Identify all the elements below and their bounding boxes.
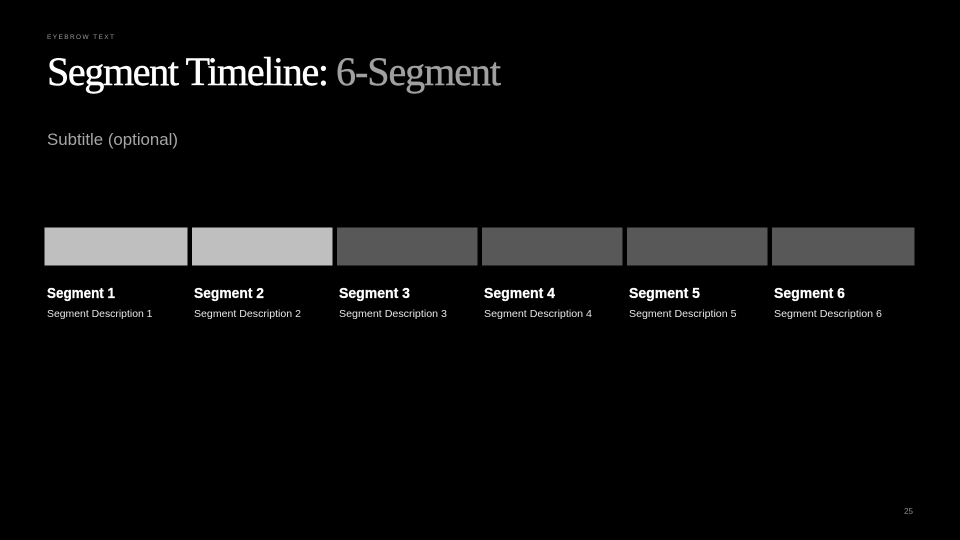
segment 6 bar — [772, 228, 914, 266]
segment 5 description: Segment Description 5 — [629, 308, 737, 320]
segment 3 description: Segment Description 3 — [339, 308, 447, 320]
segment 4 description: Segment Description 4 — [484, 308, 592, 320]
segment 6 description: Segment Description 6 — [774, 308, 882, 320]
eyebrow text: EYEBROW TEXT — [47, 34, 114, 41]
segment 4 heading: Segment 4 — [484, 286, 555, 302]
segment 1 heading: Segment 1 — [47, 286, 115, 302]
title — [47, 49, 501, 94]
subtitle: Subtitle (optional) — [47, 130, 178, 149]
segment 2 — [192, 228, 332, 320]
segment 4 bar — [482, 228, 622, 266]
segment 3 heading: Segment 3 — [339, 286, 410, 302]
segment 6 heading: Segment 6 — [774, 286, 845, 302]
title accent part: 6-Segment — [336, 49, 501, 94]
segment 5 — [627, 228, 768, 320]
segment 6 — [772, 228, 914, 320]
segment 2 description: Segment Description 2 — [194, 308, 301, 320]
page number: 25 — [904, 507, 914, 516]
segment 5 bar — [627, 228, 768, 266]
segment 4 — [482, 228, 622, 320]
segment 5 heading: Segment 5 — [629, 286, 700, 302]
segment 1 description: Segment Description 1 — [47, 308, 153, 320]
segment 3 — [337, 228, 478, 320]
segment 1 bar — [44, 228, 188, 266]
segment 1 — [44, 228, 188, 320]
segment 2 heading: Segment 2 — [194, 286, 264, 302]
segment 2 bar — [192, 228, 332, 266]
segment 3 bar — [337, 228, 478, 266]
title main part: Segment Timeline: — [47, 49, 329, 94]
